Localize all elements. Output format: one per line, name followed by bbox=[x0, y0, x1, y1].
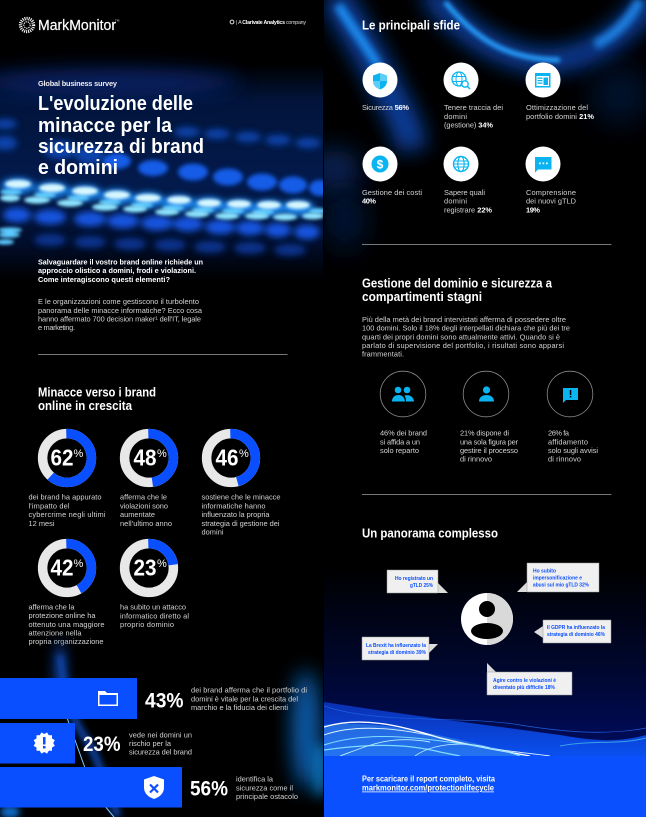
logo: MarkMonitor: MarkMonitor bbox=[38, 18, 116, 34]
label: Ottimizzazione del portfolio domini 21% bbox=[526, 103, 594, 121]
label: Sapere quali domini registrare 22% bbox=[444, 188, 492, 214]
donut chart: 48%: 48 bbox=[134, 444, 157, 470]
logo: Clarivate tagline: | A Clarivate Analytics company bbox=[236, 20, 306, 26]
icon: globe bbox=[444, 146, 478, 182]
donut caption: 46%: influenzato la propria bbox=[202, 510, 270, 519]
callout: Ho registrato un gTLD 25%: Ho registrato un bbox=[395, 576, 433, 582]
title: L'evoluzione delle bbox=[38, 92, 193, 115]
icon: alert bubble bbox=[547, 371, 593, 417]
donut caption: 46% bbox=[202, 492, 280, 536]
icon: shield with cross bbox=[144, 776, 164, 799]
callout: Il GDPR 46%: strategia di dominio 46% bbox=[547, 632, 605, 638]
callout: Ho registrato un gTLD 25%: gTLD 25% bbox=[410, 583, 433, 589]
callout: Il GDPR 46%: Il GDPR ha influenzato la bbox=[547, 625, 605, 631]
intro paragraph: E le organizzazioni come gestiscono il turbolento bbox=[38, 297, 199, 306]
caption: 21%: una sola figura per bbox=[460, 438, 519, 446]
caption: 46%: 46% dei brand bbox=[380, 428, 427, 438]
donut chart: 46%: % bbox=[239, 448, 249, 460]
paragraph: domain ownership: quarti dei propri domini sono attualmente attivi. Quando si è bbox=[362, 332, 560, 342]
donut caption: 23%: proprio dominio bbox=[120, 620, 174, 629]
callout: La Brexit 39%: strategia di dominio 39% bbox=[368, 650, 426, 656]
stat text: 43%: dei brand afferma che il portfolio di bbox=[191, 686, 307, 694]
label: Gestione dei costi 40%: 40% bbox=[362, 196, 376, 206]
donut caption: 46%: strategia di gestione dei bbox=[202, 519, 280, 528]
caption: 21%: gestire il processo bbox=[460, 446, 518, 455]
title: minacce per la bbox=[38, 114, 173, 137]
hero image: blurred blue lights bbox=[0, 56, 323, 273]
icon: person bbox=[463, 371, 509, 417]
intro paragraph bbox=[38, 297, 203, 332]
stat: 23%: 23% bbox=[83, 733, 121, 756]
stat text: 43% bbox=[191, 686, 307, 712]
logo: MarkMonitor: TM bbox=[115, 18, 120, 22]
paragraph: domain ownership: Più della metà dei brand intervistati afferma di possedere oltre bbox=[362, 315, 566, 324]
title bbox=[38, 92, 204, 179]
label: Sapere quali domini registrare 22%: Sapere quali bbox=[444, 188, 485, 197]
stat text: 43%: marchio e la fiducia dei clienti bbox=[191, 703, 288, 712]
label: Comprensione dei nuovi gTLD 19% bbox=[526, 188, 576, 214]
donut caption: 46%: informatiche hanno bbox=[202, 502, 266, 510]
label: Gestione dei costi 40% bbox=[362, 188, 422, 206]
donut chart: 46% bbox=[207, 434, 255, 482]
footer call to action bbox=[362, 774, 496, 792]
bar: 43% bbox=[0, 678, 137, 719]
icon: central person bbox=[461, 593, 513, 645]
donut chart: 23%: 23 bbox=[134, 554, 156, 580]
icon: dollar bbox=[362, 146, 398, 182]
caption: 21%: 21% dispone di bbox=[460, 428, 509, 438]
donut caption: 42%: protezione online ha bbox=[28, 611, 96, 620]
paragraph: domain ownership: frammentati. bbox=[362, 350, 404, 358]
donut chart: 62% bbox=[43, 434, 91, 482]
icon: two people bbox=[380, 371, 426, 417]
caption: 26%: di rinnovo bbox=[548, 454, 581, 464]
paragraph: domain ownership: parlato di supervisione del portfolio, i risultati sono apparsi bbox=[362, 341, 564, 350]
stat: 43%: 43% bbox=[145, 690, 184, 712]
label: Tenere traccia dei domini 34%: Tenere traccia dei bbox=[444, 103, 503, 112]
intro text bold: approccio olistico a domini, frodi e violazioni. bbox=[38, 266, 196, 275]
donut chart: 48%: % bbox=[157, 448, 167, 460]
donut chart: 48% bbox=[125, 434, 173, 482]
icon: shield bbox=[362, 62, 398, 98]
donut caption: 42%: afferma che la bbox=[28, 602, 75, 612]
donut caption: 62%: 12 mesi bbox=[28, 519, 55, 528]
icon: globe search bbox=[444, 62, 478, 98]
donut caption: 42%: propria organizzazione bbox=[28, 637, 104, 646]
callout: Agire contro le violazioni 18% bbox=[487, 663, 572, 695]
donut chart: 62%: 62 bbox=[50, 444, 74, 470]
heading: Gestione del dominio e sicurezza a compartimenti stagni: compartimenti stagni bbox=[362, 290, 482, 304]
footer band bbox=[324, 756, 646, 817]
icon: folder bbox=[98, 691, 118, 706]
donut chart: 23% bbox=[125, 544, 173, 592]
heading: Gestione del dominio e sicurezza a compartimenti stagni bbox=[362, 276, 553, 304]
paragraph: domain ownership: 100 domini. Solo il 18% degli interpellati dichiara che più dei tre bbox=[362, 324, 570, 332]
label: Ottimizzazione del portfolio domini 21%: portfolio domini 21% bbox=[526, 112, 594, 121]
donut caption: 62%: l'impatto del bbox=[28, 502, 70, 510]
donut caption: 42% bbox=[28, 602, 104, 646]
stat text: 56% bbox=[236, 774, 298, 801]
label: Tenere traccia dei domini 34%: domini bbox=[444, 112, 467, 121]
stat: 56%: 56% bbox=[190, 778, 228, 800]
label: Tenere traccia dei domini 34% bbox=[444, 103, 503, 130]
caption: 21% bbox=[460, 428, 519, 464]
donut chart: 42%: 42 bbox=[50, 554, 74, 580]
bar: 23% bbox=[0, 723, 75, 764]
intro paragraph: e marketing. bbox=[38, 323, 75, 332]
caption: 21%: di rinnovo bbox=[460, 454, 492, 464]
stat text: 56%: principale ostacolo bbox=[236, 792, 298, 801]
title: e domini bbox=[38, 156, 118, 179]
heading: Minacce verso i brand online in crescita: Minacce verso i brand bbox=[38, 386, 156, 400]
callout: Il GDPR 46% bbox=[534, 620, 611, 643]
callout: Agire contro le violazioni 18%: Agire contro le violazioni è bbox=[493, 678, 556, 684]
background: blue light curves bbox=[310, 0, 646, 250]
heading: Un panorama complesso: Un panorama complesso bbox=[362, 526, 498, 540]
title: sicurezza di brand bbox=[38, 135, 204, 158]
wave lines bbox=[324, 702, 646, 756]
label: Sapere quali domini registrare 22%: registrare 22% bbox=[444, 206, 492, 214]
panel: left column bbox=[0, 0, 331, 817]
eyebrow: Global business survey: Global business survey bbox=[38, 79, 118, 88]
donut caption: 42%: ottenuto una maggiore bbox=[28, 620, 104, 629]
donut caption: 62%: cybercrime negli ultimi bbox=[28, 510, 106, 519]
donut caption: 62%: dei brand ha appurato bbox=[28, 492, 102, 502]
intro text bold: Come interagiscono questi elementi? bbox=[38, 275, 170, 284]
icon: dollar: $ bbox=[377, 158, 384, 172]
background: blue light streaks bbox=[0, 640, 328, 817]
heading: Minacce verso i brand online in crescita: online in crescita bbox=[38, 399, 133, 413]
bar: 56% bbox=[0, 767, 182, 808]
donut caption: 23%: ha subito un attacco bbox=[120, 602, 186, 612]
callout: Ho subito impersonificazione 32%: abusi sul mio gTLD 32% bbox=[533, 582, 589, 588]
caption: 46% bbox=[380, 428, 427, 455]
label: Sapere quali domini registrare 22%: domini bbox=[444, 196, 467, 206]
donut caption: 23%: informatico diretto al bbox=[120, 612, 189, 620]
label: Comprensione dei nuovi gTLD 19%: dei nuovi gTLD bbox=[526, 196, 576, 206]
icon: portfolio window bbox=[526, 62, 560, 98]
stat text: 23%: vede nei domini un bbox=[129, 730, 192, 740]
callout: La Brexit 39% bbox=[362, 637, 438, 660]
donut caption: 48%: violazioni sono bbox=[120, 502, 168, 510]
callout: Agire contro le violazioni 18%: diventato più difficile 18% bbox=[493, 685, 555, 691]
stat text: 23% bbox=[129, 730, 192, 756]
donut chart: 42%: % bbox=[74, 558, 84, 570]
intro text bold bbox=[38, 258, 203, 284]
intro paragraph: hanno affermato 700 decision maker¹ dell'IT, legale bbox=[38, 314, 201, 324]
label: Tenere traccia dei domini 34%: (gestione) 34% bbox=[444, 120, 493, 130]
footer call to action: Per scaricare il report completo, visita bbox=[362, 774, 496, 784]
intro paragraph: panorama delle minacce informatiche? Ecco cosa bbox=[38, 306, 203, 315]
label: Comprensione dei nuovi gTLD 19%: Comprensione bbox=[526, 188, 576, 197]
donut chart: 23%: % bbox=[157, 558, 167, 570]
donut caption: 42%: attenzione nella bbox=[28, 628, 82, 638]
icon: speech bubble bbox=[526, 146, 560, 182]
callout: La Brexit 39%: La Brexit ha influenzato la bbox=[366, 643, 426, 649]
label: Gestione dei costi 40%: Gestione dei costi bbox=[362, 188, 422, 197]
stat text: 56%: identifica la bbox=[236, 774, 274, 784]
heading: Minacce verso i brand online in crescita bbox=[38, 386, 156, 413]
donut caption: 48%: aumentate bbox=[120, 510, 155, 519]
donut caption: 48% bbox=[120, 492, 172, 528]
donut caption: 46%: domini bbox=[202, 528, 224, 536]
icon: alert badge bbox=[34, 732, 55, 754]
donut chart: 62%: % bbox=[74, 448, 84, 460]
callout: Ho subito impersonificazione 32% bbox=[517, 563, 599, 592]
caption: 26%: solo sugli avvisi bbox=[548, 446, 598, 455]
donut caption: 62% bbox=[28, 492, 106, 528]
footer call to action: markmonitor.com/protectionlifecycle bbox=[362, 784, 495, 792]
caption: 46%: si affida a un bbox=[380, 438, 420, 446]
callout: Ho subito impersonificazione 32%: impersonificazione e bbox=[533, 576, 582, 582]
stat text: 23%: rischio per la bbox=[129, 739, 172, 748]
label: Sicurezza 56%: Sicurezza 56% bbox=[362, 103, 409, 112]
caption: 26% bbox=[548, 428, 598, 464]
callout: Ho subito impersonificazione 32%: Ho subito bbox=[533, 568, 557, 574]
donut chart: 42% bbox=[43, 544, 91, 592]
donut chart: 46%: 46 bbox=[216, 444, 238, 470]
intro text bold: Salvaguardare il vostro brand online richiede un bbox=[38, 258, 203, 266]
label: Ottimizzazione del portfolio domini 21%: Ottimizzazione del bbox=[526, 103, 588, 112]
donut caption: 23% bbox=[120, 602, 189, 629]
heading: Le principali sfide: Le principali sfide bbox=[362, 18, 460, 32]
caption: 26%: 26% fa bbox=[548, 428, 570, 438]
label: Comprensione dei nuovi gTLD 19%: 19% bbox=[526, 206, 540, 214]
stat text: 43%: domini è vitale per la crescita del bbox=[191, 694, 298, 704]
caption: 26%: affidamento bbox=[548, 438, 588, 446]
stat text: 23%: sicurezza del brand bbox=[129, 748, 192, 756]
stat text: 56%: sicurezza come il bbox=[236, 784, 293, 792]
icon: sunburst bbox=[20, 18, 34, 32]
donut caption: 46%: sostiene che le minacce bbox=[202, 492, 280, 502]
heading: Gestione del dominio e sicurezza a compartimenti stagni: Gestione del dominio e sicurezza a bbox=[362, 276, 553, 290]
donut caption: 48%: nell'ultimo anno bbox=[120, 519, 172, 528]
donut caption: 48%: afferma che le bbox=[120, 492, 167, 502]
paragraph: domain ownership bbox=[362, 315, 570, 358]
panel: right column bbox=[310, 0, 646, 817]
caption: 46%: solo reparto bbox=[380, 446, 419, 455]
callout: Ho registrato un gTLD 25% bbox=[387, 570, 448, 593]
